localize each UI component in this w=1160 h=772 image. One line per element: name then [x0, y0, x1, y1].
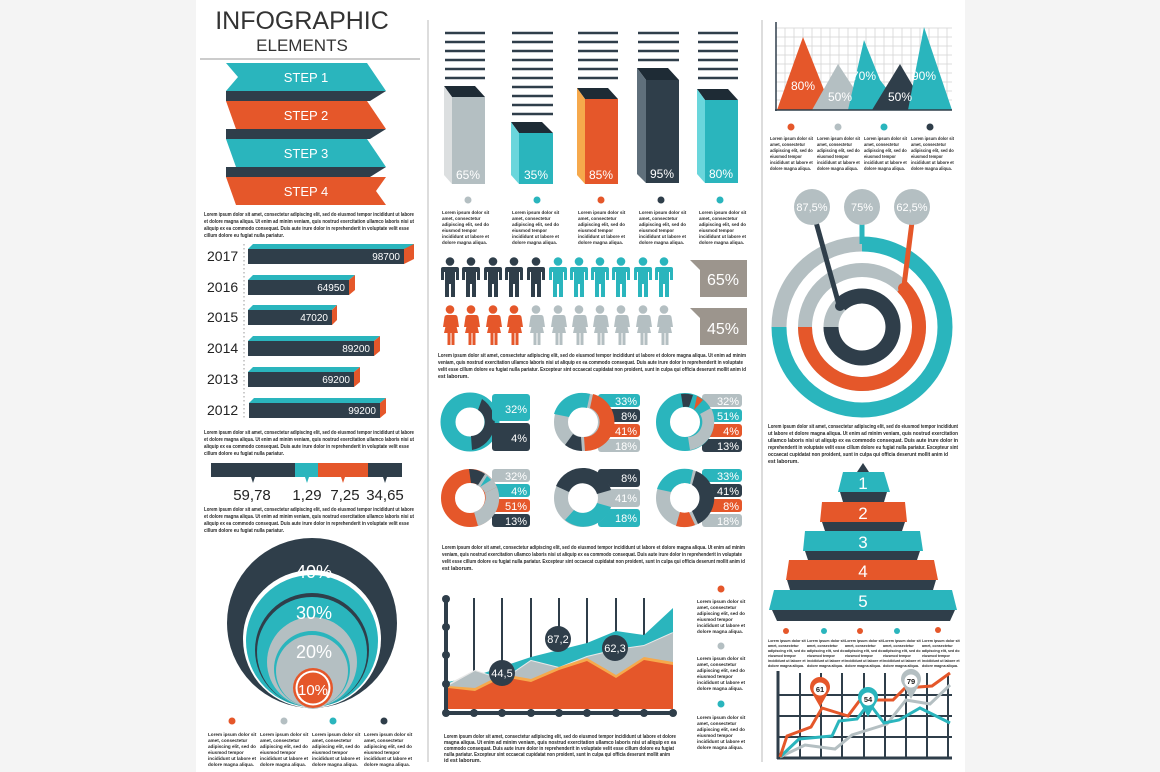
legend: 3D bars: dolore magna aliqua.	[578, 240, 623, 245]
concentric circles chart: 10%	[298, 682, 328, 699]
text block: steps: cillum dolore eu fugiat nulla pariatur.	[204, 233, 284, 239]
bar 2016	[248, 275, 355, 295]
legend: pyramid	[768, 627, 961, 668]
bar 2013	[248, 367, 360, 387]
bar 85%: 85%	[589, 168, 613, 182]
text block: radial: Lorem ipsum dolor sit amet, consectetur adipiscing elit, sed do eiusmod tempor incididunt	[768, 424, 958, 430]
legend: circles: adipiscing elit, sed do	[364, 744, 412, 749]
donut 3: 4%	[723, 426, 739, 438]
donut 5: 8%	[621, 473, 637, 485]
legend: pyramid: amet, consectetur	[845, 644, 876, 648]
legend: triangles: adipiscing elit, sed do	[770, 148, 813, 153]
legend: pyramid: amet, consectetur	[768, 644, 799, 648]
tag: 45%: 45%	[707, 321, 739, 338]
people chart: women	[443, 305, 673, 345]
legend: circles: eiusmod tempor	[364, 750, 400, 755]
text block: radial	[768, 424, 958, 465]
text block: people: velit esse cillum dolore eu fugiat nulla pariatur. Excepteur sint occaecat cupidatat non proident, sunt in culpa qui officia deserunt mollit anim id	[438, 367, 746, 373]
legend: circles: eiusmod tempor	[260, 750, 296, 755]
legend: area chart: eiusmod tempor	[697, 733, 733, 738]
text block: donuts: Lorem ipsum dolor sit amet, consectetur adipiscing elit, sed do eiusmod tempor incididunt ut labore et dolore magna aliqua. Ut enim ad minim	[442, 545, 745, 551]
donut 3	[663, 394, 742, 453]
text block: years	[204, 430, 414, 457]
text block: years: Lorem ipsum dolor sit amet, consectetur adipiscing elit, sed do eiusmod tempor incididunt ut labore	[204, 430, 414, 436]
donut 4: 4%	[511, 486, 527, 498]
legend: circles: adipiscing elit, sed do	[312, 744, 360, 749]
text block: area chart: Lorem ipsum dolor sit amet, consectetur adipiscing elit, sed do eiusmod tempor incididunt ut labore et dolore	[444, 734, 676, 740]
bar 35%	[511, 122, 553, 184]
donut 6: 18%	[717, 516, 739, 528]
bubble 87,5%: 87,5%	[796, 202, 828, 214]
title	[200, 7, 420, 59]
legend: pyramid: adipiscing elit, sed do	[845, 649, 883, 653]
step 2	[226, 101, 386, 129]
legend: triangles: dolore magna aliqua.	[864, 166, 905, 171]
legend: pyramid: dolore magna aliqua.	[768, 664, 804, 668]
legend: area chart: amet, consectetur	[697, 605, 737, 610]
value: 87,2: 87,2	[547, 634, 569, 646]
text block: steps: aliquip ex ea commodo consequat. Duis aute irure dolor in reprehenderit in voluptate velit esse	[204, 226, 409, 232]
legend: pyramid: amet, consectetur	[807, 644, 838, 648]
page background	[196, 0, 965, 772]
legend: circles: amet, consectetur	[312, 738, 352, 743]
text block: donuts: velit esse cillum dolore eu fugiat nulla pariatur. Excepteur sint occaecat cupidatat non proident, sunt in culpa qui officia deserunt mollit anim id	[442, 559, 745, 565]
bar 2015	[248, 305, 337, 325]
triangle chart: 50%	[888, 90, 912, 104]
legend: circles: Lorem ipsum dolor sit	[312, 732, 361, 737]
legend: area chart: incididunt ut labore et	[697, 680, 745, 685]
legend: 3D bars: eiusmod tempor	[699, 228, 734, 233]
legend: area chart: amet, consectetur	[697, 721, 737, 726]
legend: triangles: amet, consectetur	[864, 142, 899, 147]
pin 54: 54	[864, 695, 873, 704]
bar 2012: 99200	[348, 406, 376, 417]
bubble 62,5%	[894, 189, 930, 225]
layer 1	[838, 472, 890, 493]
text block: donuts: veniam, quis nostrud exercitation ullamco laboris nisi ut aliquip ex ea commodo consequat. Duis aute irure dolor in reprehenderit in voluptate	[442, 552, 742, 558]
legend: 3D bars: dolore magna aliqua.	[442, 240, 487, 245]
text block: years: et dolore magna aliqua. Ut enim ad minim veniam, quis nostrud exercitation ullamco laboris nisi ut	[204, 437, 414, 443]
bar 2012	[249, 398, 386, 418]
legend: circles: eiusmod tempor	[208, 750, 244, 755]
legend: triangles: eiusmod tempor	[864, 154, 896, 159]
step 4: STEP 4	[284, 184, 328, 199]
concentric circles chart: 40%	[296, 562, 332, 582]
legend: 3D bars: incididunt ut labore et	[699, 234, 747, 239]
legend: 3D bars: Lorem ipsum dolor sit	[639, 210, 687, 215]
bar chart: years: 2013	[207, 371, 238, 387]
legend: triangles: incididunt ut labore et	[817, 160, 860, 165]
bubble 62,5%: 62,5%	[896, 202, 928, 214]
legend: circles: Lorem ipsum dolor sit	[364, 732, 413, 737]
step 3: STEP 3	[284, 146, 328, 161]
legend: triangles: amet, consectetur	[770, 142, 805, 147]
legend: pyramid: dolore magna aliqua.	[922, 664, 958, 668]
text block: people: veniam, quis nostrud exercitation ullamco laboris nisi ut aliquip ex ea commodo consequat. Duis aute irure dolor in reprehenderit in voluptate	[438, 360, 743, 366]
layer 2	[820, 502, 907, 523]
pin 54	[858, 687, 878, 717]
legend: pyramid: Lorem ipsum dolor sit	[883, 639, 922, 643]
layer 4	[786, 560, 938, 581]
legend: circles: dolore magna aliqua.	[364, 762, 410, 767]
legend: triangles: eiusmod tempor	[817, 154, 849, 159]
donut 6: 33%	[717, 471, 739, 483]
legend: pyramid: amet, consectetur	[922, 644, 953, 648]
title: INFOGRAPHIC	[215, 7, 389, 35]
title: ELEMENTS	[256, 36, 348, 55]
legend: circles: amet, consectetur	[208, 738, 248, 743]
area chart	[442, 595, 677, 717]
legend: 3D bars: dolore magna aliqua.	[639, 240, 684, 245]
donut 3: 32%	[717, 396, 739, 408]
legend: pyramid: dolore magna aliqua.	[845, 664, 881, 668]
text block: people: Lorem ipsum dolor sit amet, consectetur adipiscing elit, sed do eiusmod tempor incididunt ut labore et dolore magna aliqua. Ut enim ad minim	[438, 353, 746, 359]
legend: triangles: adipiscing elit, sed do	[864, 148, 907, 153]
layer 2: 2	[858, 504, 868, 523]
legend: 3D bars: dolore magna aliqua.	[512, 240, 557, 245]
value: 62,3: 62,3	[604, 643, 626, 655]
bar 95%: 95%	[650, 167, 674, 181]
donut 4	[448, 469, 530, 528]
donut 2: 33%	[615, 396, 637, 408]
legend: pyramid: eiusmod tempor	[807, 654, 836, 658]
legend: triangles: dolore magna aliqua.	[770, 166, 811, 171]
legend: triangles: Lorem ipsum dolor sit	[770, 136, 814, 141]
legend: circles: incididunt ut labore et	[208, 756, 256, 761]
legend: area chart: dolore magna aliqua.	[697, 629, 743, 634]
legend: area chart: adipiscing elit, sed do	[697, 668, 745, 673]
legend: 3D bars: incididunt ut labore et	[512, 234, 560, 239]
legend: pyramid: incididunt ut labore et	[768, 659, 806, 663]
legend: circles: dolore magna aliqua.	[208, 762, 254, 767]
legend: triangles: adipiscing elit, sed do	[911, 148, 954, 153]
donut 5: 18%	[615, 513, 637, 525]
text block: segmented: et dolore magna aliqua. Ut enim ad minim veniam, quis nostrud exercitation ullamco laboris nisi ut	[204, 514, 414, 520]
donut 5	[556, 468, 640, 527]
legend: triangles: amet, consectetur	[911, 142, 946, 147]
layer 5	[769, 590, 957, 611]
bar chart: years: 2015	[207, 309, 238, 325]
legend: triangles: incididunt ut labore et	[864, 160, 907, 165]
legend: triangles: dolore magna aliqua.	[817, 166, 858, 171]
legend: circles: incididunt ut labore et	[260, 756, 308, 761]
bar 2017	[248, 244, 414, 264]
text block: segmented: aliquip ex ea commodo consequat. Duis aute irure dolor in reprehenderit in voluptate velit esse	[204, 521, 409, 527]
text block: years: aliquip ex ea commodo consequat. Duis aute irure dolor in reprehenderit in voluptate velit esse	[204, 444, 409, 450]
step 1: STEP 1	[284, 70, 328, 85]
legend: area chart: eiusmod tempor	[697, 674, 733, 679]
segmented bar	[211, 463, 404, 504]
bar 35%: 35%	[524, 168, 548, 182]
value: 44,5: 44,5	[491, 668, 513, 680]
legend: circles: Lorem ipsum dolor sit	[208, 732, 257, 737]
concentric circles chart	[227, 538, 397, 709]
text block: radial: occaecat cupidatat non proident, sunt in culpa qui officia deserunt mollit anim id	[768, 452, 948, 458]
step ribbons	[226, 63, 386, 205]
text block: segmented: cillum dolore eu fugiat nulla pariatur.	[204, 528, 284, 534]
text block: people	[438, 353, 746, 380]
legend: circles: adipiscing elit, sed do	[260, 744, 308, 749]
legend: triangles: Lorem ipsum dolor sit	[911, 136, 955, 141]
legend: pyramid: eiusmod tempor	[922, 654, 951, 658]
legend: area chart: amet, consectetur	[697, 662, 737, 667]
legend: pyramid: adipiscing elit, sed do	[922, 649, 960, 653]
text block: steps: Lorem ipsum dolor sit amet, consectetur adipiscing elit, sed do eiusmod tempor incididunt ut labore	[204, 212, 414, 218]
legend: area chart: dolore magna aliqua.	[697, 686, 743, 691]
legend: 3D bars: Lorem ipsum dolor sit	[442, 210, 490, 215]
bar chart: years	[207, 244, 414, 420]
donut 5: 41%	[615, 493, 637, 505]
donut 6	[657, 469, 742, 528]
triangle chart: 80%	[791, 79, 815, 93]
pyramid	[769, 463, 957, 621]
legend: circles: amet, consectetur	[260, 738, 300, 743]
legend: circles: dolore magna aliqua.	[312, 762, 358, 767]
concentric circles chart: 30%	[296, 603, 332, 623]
legend: area chart: incididunt ut labore et	[697, 739, 745, 744]
legend: pyramid: dolore magna aliqua.	[807, 664, 843, 668]
legend: triangles	[770, 124, 955, 171]
legend: area chart: dolore magna aliqua.	[697, 745, 743, 750]
legend: 3D bars: amet, consectetur	[578, 216, 617, 221]
donut 2: 18%	[615, 441, 637, 453]
donut 1: 32%	[505, 404, 527, 416]
people chart: men	[441, 257, 673, 297]
legend: pyramid: incididunt ut labore et	[807, 659, 845, 663]
layer 3	[803, 531, 923, 552]
legend: circles: Lorem ipsum dolor sit	[260, 732, 309, 737]
legend: circles	[208, 718, 413, 767]
pin 61	[810, 677, 830, 707]
pin 79	[901, 669, 921, 699]
legend: 3D bars: eiusmod tempor	[578, 228, 613, 233]
bar 65%: 65%	[456, 168, 480, 182]
text block: area chart: commodo consequat. Duis aute irure dolor in reprehenderit in voluptate velit esse cillum dolore eu fugiat	[444, 746, 674, 752]
legend: triangles: Lorem ipsum dolor sit	[864, 136, 908, 141]
legend: circles: eiusmod tempor	[312, 750, 348, 755]
donut 2: 41%	[615, 426, 637, 438]
bar 2016: 64950	[317, 283, 345, 294]
legend: pyramid: incididunt ut labore et	[845, 659, 883, 663]
legend: area chart	[697, 586, 746, 750]
legend: pyramid: dolore magna aliqua.	[883, 664, 919, 668]
segmented bar: 1,29	[292, 487, 322, 504]
donut 4: 32%	[505, 471, 527, 483]
legend: circles: amet, consectetur	[364, 738, 404, 743]
donut charts	[448, 393, 742, 528]
donut 2: 8%	[621, 411, 637, 423]
legend: triangles: eiusmod tempor	[911, 154, 943, 159]
text block: area chart: id est laborum.	[444, 758, 481, 764]
legend: 3D bars	[442, 196, 747, 245]
legend: pyramid: Lorem ipsum dolor sit	[807, 639, 846, 643]
text block: area chart	[444, 734, 676, 764]
legend: pyramid: eiusmod tempor	[883, 654, 912, 658]
segmented bar: 34,65	[366, 487, 404, 504]
pin 79: 79	[907, 677, 915, 686]
legend: area chart: adipiscing elit, sed do	[697, 611, 745, 616]
value: 44,5	[489, 660, 515, 686]
legend: triangles: incididunt ut labore et	[911, 160, 954, 165]
bar chart: years: 2016	[207, 279, 238, 295]
bar 80%	[697, 89, 738, 183]
step 1	[226, 63, 386, 91]
donut 2	[554, 393, 640, 453]
legend: 3D bars: Lorem ipsum dolor sit	[578, 210, 626, 215]
bubble 87,5%	[794, 189, 830, 225]
bar chart: years: 2012	[207, 402, 238, 418]
legend: pyramid: adipiscing elit, sed do	[883, 649, 921, 653]
segmented bar: 59,78	[233, 487, 271, 504]
triangle chart: 50%	[828, 90, 852, 104]
legend: circles: adipiscing elit, sed do	[208, 744, 256, 749]
layer 1: 1	[858, 474, 868, 493]
legend: triangles: adipiscing elit, sed do	[817, 148, 860, 153]
step 2: STEP 2	[284, 108, 328, 123]
tag: 45%	[690, 308, 747, 345]
bar 80%: 80%	[709, 167, 733, 181]
triangle chart: 90%	[912, 69, 936, 83]
legend: pyramid: amet, consectetur	[883, 644, 914, 648]
legend: circles: incididunt ut labore et	[312, 756, 360, 761]
bar 85%	[577, 88, 618, 184]
legend: pyramid: incididunt ut labore et	[883, 659, 921, 663]
text block: area chart: magna aliqua. Ut enim ad minim veniam, quis nostrud exercitation ullamco laboris nisi ut aliquip ex ea	[444, 740, 676, 746]
legend: pyramid: eiusmod tempor	[845, 654, 874, 658]
segmented bar: 7,25	[330, 487, 360, 504]
text block: radial: est laborum.	[768, 459, 799, 465]
donut 6: 8%	[723, 501, 739, 513]
tag: 65%: 65%	[707, 272, 739, 289]
legend: triangles: Lorem ipsum dolor sit	[817, 136, 861, 141]
legend: circles: dolore magna aliqua.	[260, 762, 306, 767]
donut 6: 41%	[717, 486, 739, 498]
text block: steps: et dolore magna aliqua. Ut enim ad minim veniam, quis nostrud exercitation ullamco laboris nisi ut	[204, 219, 414, 225]
legend: 3D bars: eiusmod tempor	[512, 228, 547, 233]
legend: area chart: Lorem ipsum dolor sit	[697, 715, 746, 720]
legend: 3D bars: eiusmod tempor	[442, 228, 477, 233]
concentric circles chart: 20%	[296, 642, 332, 662]
legend: pyramid: Lorem ipsum dolor sit	[922, 639, 961, 643]
value: 87,2	[545, 626, 571, 652]
text block: segmented: Lorem ipsum dolor sit amet, consectetur adipiscing elit, sed do eiusmod tempor incididunt ut labore	[204, 507, 414, 513]
step 3	[226, 139, 386, 167]
legend: 3D bars: amet, consectetur	[639, 216, 678, 221]
legend: triangles: dolore magna aliqua.	[911, 166, 952, 171]
layer 5: 5	[858, 592, 868, 611]
line chart	[777, 669, 952, 759]
bar 2014: 89200	[342, 344, 370, 355]
legend: 3D bars: incididunt ut labore et	[639, 234, 687, 239]
3D bar chart	[444, 33, 738, 184]
legend: 3D bars: incididunt ut labore et	[578, 234, 626, 239]
legend: 3D bars: amet, consectetur	[512, 216, 551, 221]
legend: pyramid: Lorem ipsum dolor sit	[768, 639, 807, 643]
bar 2014	[248, 336, 380, 356]
donut 1: 4%	[511, 433, 527, 445]
radial progress chart	[779, 189, 945, 410]
legend: 3D bars: adipiscing elit, sed do	[512, 222, 559, 227]
legend: area chart: Lorem ipsum dolor sit	[697, 656, 746, 661]
layer 3: 3	[858, 533, 868, 552]
legend: triangles: incididunt ut labore et	[770, 160, 813, 165]
legend: triangles: amet, consectetur	[817, 142, 852, 147]
legend: 3D bars: adipiscing elit, sed do	[442, 222, 489, 227]
triangle chart: 70%	[852, 69, 876, 83]
legend: 3D bars: dolore magna aliqua.	[699, 240, 744, 245]
legend: pyramid: eiusmod tempor	[768, 654, 797, 658]
triangle chart	[775, 22, 952, 111]
legend: 3D bars: adipiscing elit, sed do	[699, 222, 746, 227]
legend: 3D bars: adipiscing elit, sed do	[639, 222, 686, 227]
bar chart: years: 2017	[207, 248, 238, 264]
donut 4: 51%	[505, 501, 527, 513]
legend: 3D bars: adipiscing elit, sed do	[578, 222, 625, 227]
text block: donuts	[442, 545, 745, 572]
text block: radial: reprehenderit in voluptate velit esse cillum dolore eu fugiat nulla pariatur. Excepteur sint	[768, 445, 958, 451]
donut 1	[448, 394, 530, 451]
legend: 3D bars: amet, consectetur	[699, 216, 738, 221]
text block: years: cillum dolore eu fugiat nulla pariatur.	[204, 451, 284, 457]
donut 4: 13%	[505, 516, 527, 528]
bar 95%	[637, 68, 679, 183]
donut 3: 13%	[717, 441, 739, 453]
pin 61: 61	[816, 685, 824, 694]
bar chart: years: 2014	[207, 340, 238, 356]
legend: area chart: eiusmod tempor	[697, 617, 733, 622]
text block: steps	[204, 212, 414, 239]
legend: pyramid: incididunt ut labore et	[922, 659, 960, 663]
legend: 3D bars: Lorem ipsum dolor sit	[512, 210, 560, 215]
donut 3: 51%	[717, 411, 739, 423]
legend: 3D bars: amet, consectetur	[442, 216, 481, 221]
legend: area chart: incididunt ut labore et	[697, 623, 745, 628]
legend: triangles: eiusmod tempor	[770, 154, 802, 159]
legend: circles: incididunt ut labore et	[364, 756, 412, 761]
text block: donuts: est laborum.	[442, 566, 473, 572]
bar 2015: 47020	[300, 313, 328, 324]
legend: pyramid: adipiscing elit, sed do	[807, 649, 845, 653]
text block: people: est laborum.	[438, 374, 469, 380]
legend: area chart: adipiscing elit, sed do	[697, 727, 745, 732]
value: 62,3	[602, 635, 628, 661]
bar 65%	[444, 86, 485, 184]
legend: 3D bars: incididunt ut labore et	[442, 234, 490, 239]
layer 4: 4	[858, 562, 868, 581]
legend: 3D bars: Lorem ipsum dolor sit	[699, 210, 747, 215]
legend: pyramid: Lorem ipsum dolor sit	[845, 639, 884, 643]
text block: radial: ullamco laboris nisi ut aliquip ex ea commodo consequat. Duis aute irure dolor in	[768, 438, 958, 444]
bubble 75%: 75%	[851, 202, 873, 214]
text block: segmented	[204, 507, 414, 534]
legend: area chart: Lorem ipsum dolor sit	[697, 599, 746, 604]
text block: radial: ut labore et dolore magna aliqua. Ut enim ad minim veniam, quis nostrud exercitation	[768, 431, 958, 437]
bar 2013: 69200	[322, 375, 350, 386]
tag: 65%	[690, 260, 747, 297]
legend: 3D bars: eiusmod tempor	[639, 228, 674, 233]
text block: area chart: nulla pariatur. Excepteur sint occaecat cupidatat non proident, sunt in culpa qui officia deserunt mollit anim	[444, 752, 670, 758]
legend: pyramid: adipiscing elit, sed do	[768, 649, 806, 653]
step 4	[226, 177, 386, 205]
bubble 75%	[844, 189, 880, 225]
bar 2017: 98700	[372, 252, 400, 263]
